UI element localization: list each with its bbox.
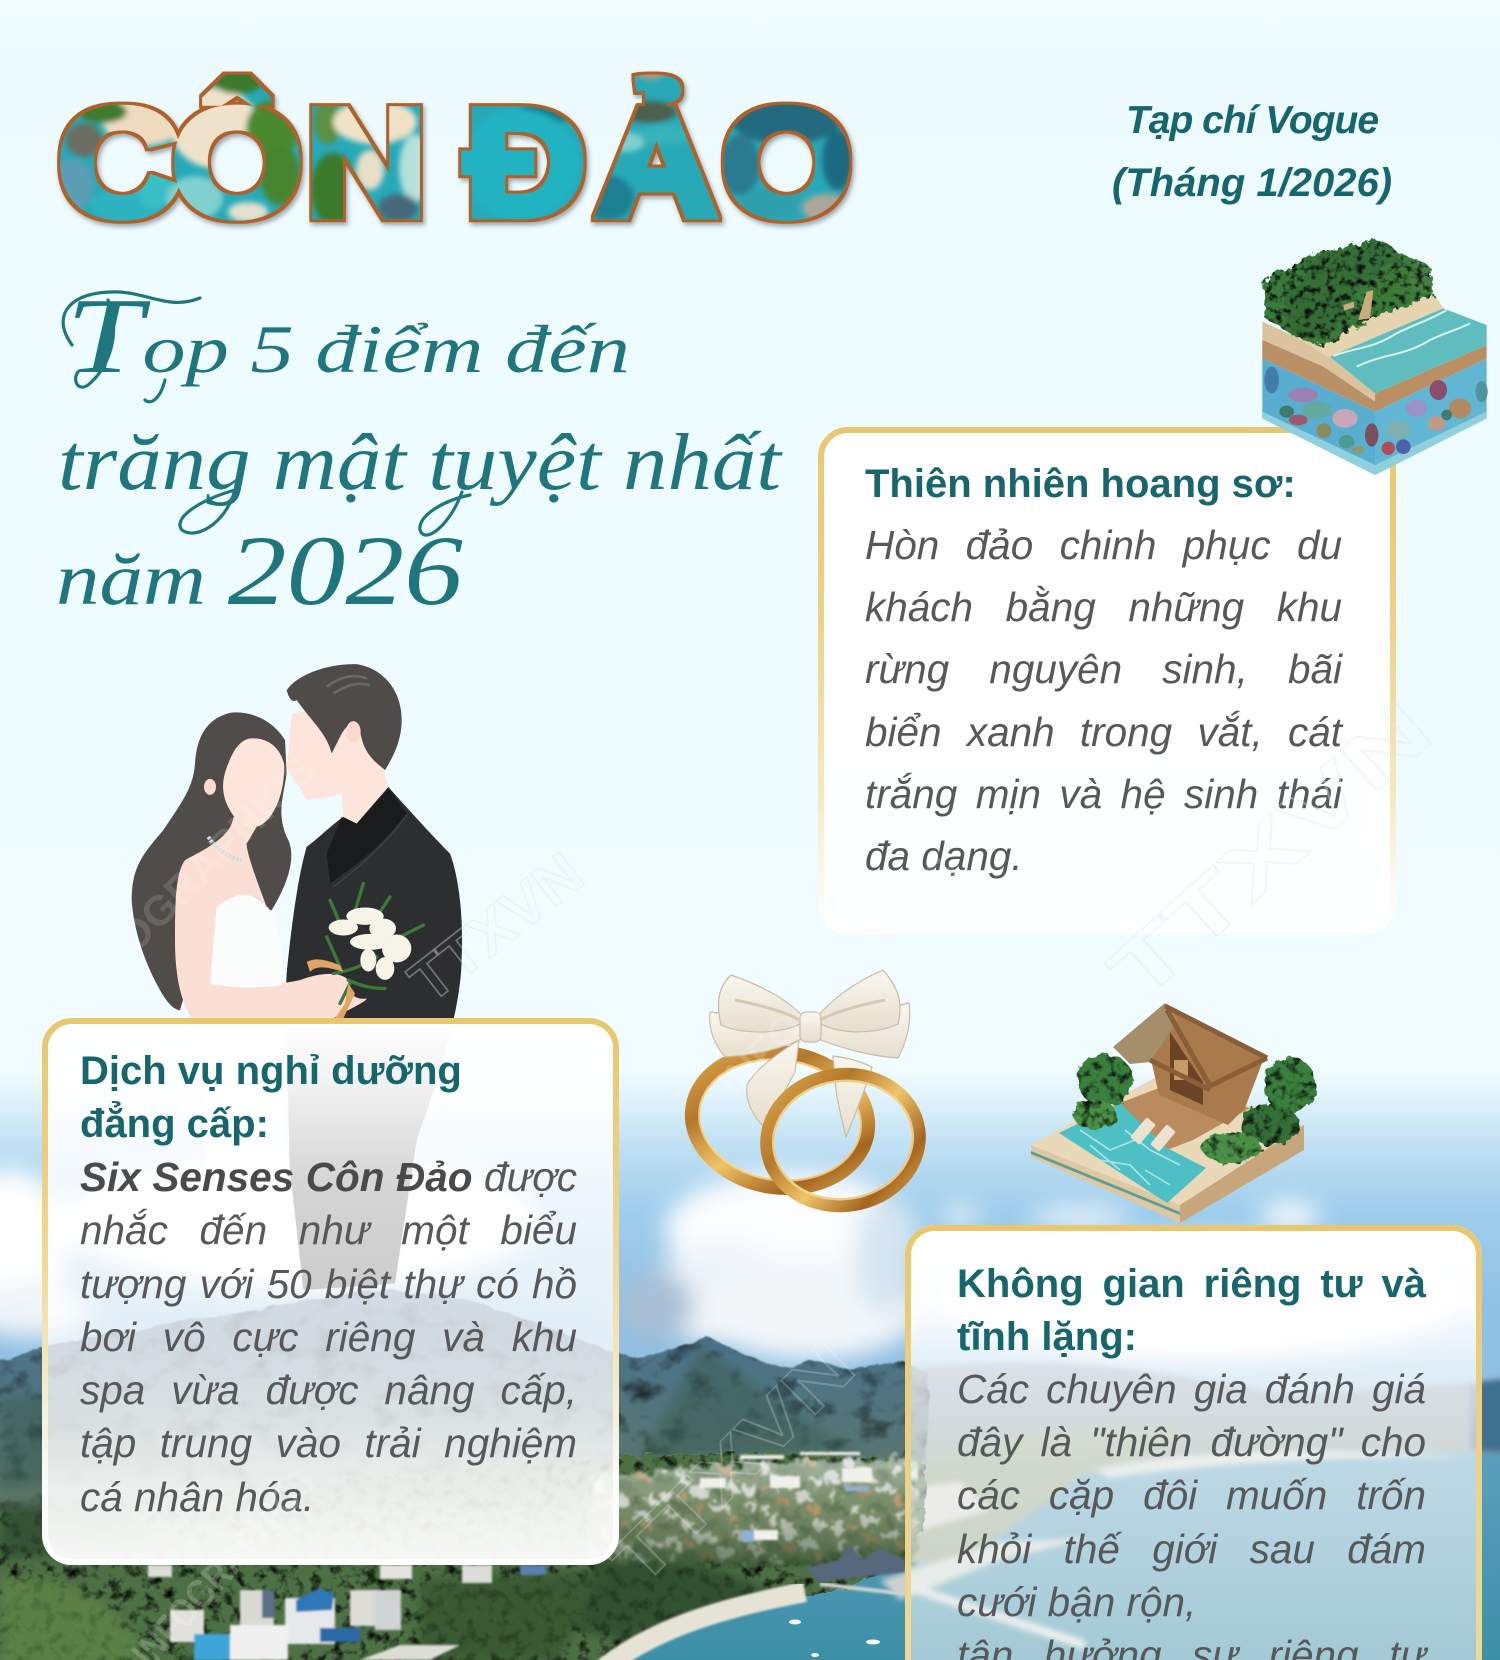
sand top (1290, 287, 1443, 358)
distant sea (600, 1445, 1500, 1660)
groom neck and face (287, 707, 388, 824)
base top (1031, 1075, 1304, 1205)
heading: script subtitle (56, 277, 783, 620)
body text (80, 1154, 577, 1520)
corals (1264, 367, 1488, 455)
sand right face (1375, 345, 1487, 412)
water top (1330, 308, 1487, 393)
watermark text left: INFOGRAPHICS (58, 745, 325, 1011)
bride back hair (132, 712, 291, 1010)
lit window (1174, 1060, 1188, 1080)
illustration: island cross-section with coral (1262, 238, 1488, 475)
body text: trắng mịn và hệ sinh thái (865, 771, 1342, 817)
body text (865, 522, 1344, 879)
body text: cá nhân hóa. (80, 1474, 314, 1520)
path and sign (1343, 290, 1373, 320)
peninsula sand and coast behind the panel (880, 1427, 1470, 1650)
watermark mark centre: TTXVN (397, 839, 596, 1015)
illustration: bride and groom (132, 664, 462, 1290)
bride necklace (208, 837, 242, 860)
body text: tập trung vào trải nghiệm (80, 1420, 577, 1466)
town buildings (590, 1458, 915, 1566)
groom hair (287, 664, 402, 770)
heading: Không gian riêng tư và (957, 1262, 1426, 1306)
body text: cưới bận rộn, (957, 1579, 1196, 1625)
bride ear (204, 779, 216, 795)
body text: nhắc đến như một biểu (80, 1207, 577, 1253)
bottom edge (1262, 412, 1487, 475)
roof frame (1150, 1006, 1267, 1090)
source: Tạp chí Vogue: (Tháng 1/2026) (1112, 161, 1392, 205)
body text: các cặp đôi muốn trốn (957, 1472, 1426, 1518)
body text: khỏi thế giới sau đám (957, 1526, 1426, 1572)
jetty (820, 1584, 905, 1594)
heading (80, 1049, 462, 1146)
town details (700, 1452, 905, 1582)
hair shine (327, 676, 370, 694)
ground and forest (0, 1452, 925, 1660)
bow (710, 970, 910, 1137)
body text: Hòn đảo chinh phục du (865, 522, 1342, 568)
body text: biển xanh trong vắt, cát (865, 709, 1342, 755)
heading: Dịch vụ nghỉ dưỡng (80, 1049, 462, 1093)
subtitle line 2: trăng mật tuyệt nhất (58, 419, 783, 507)
body text: khách bằng những khu (865, 584, 1342, 630)
soil band (1262, 340, 1375, 412)
ribbon (307, 959, 355, 1018)
watermark mark lower: TTXVN (595, 1326, 870, 1601)
white flowers (329, 908, 411, 980)
ring one (684, 1041, 876, 1199)
body text: Six Senses Côn Đảo được (80, 1154, 577, 1200)
house interior (1170, 1032, 1203, 1105)
subtitle line 1: Top 5 điểm đến (66, 277, 630, 396)
boats (789, 1620, 880, 1657)
source: Tạp chí Vogue (1112, 99, 1392, 205)
waves (1333, 310, 1470, 367)
panel: không gian riêng tư và tĩnh lặng (905, 1225, 1482, 1660)
sun loungers (1130, 1117, 1176, 1152)
heading: đẳng cấp: (80, 1102, 269, 1146)
mountain shading (0, 1345, 860, 1490)
pool (1059, 1103, 1206, 1203)
right edge hill (1470, 1378, 1500, 1452)
leaves (327, 884, 423, 1004)
panel: dịch vụ nghỉ dưỡng đẳng cấp (42, 1018, 619, 1565)
forest (1263, 240, 1433, 347)
underwater right face (1375, 358, 1487, 475)
lower dress behind the panel (200, 1018, 292, 1274)
body text: Các chuyên gia đánh giá (957, 1366, 1426, 1412)
sand left face (1262, 322, 1375, 412)
hotel buildings at the bottom (148, 1565, 546, 1660)
far hill behind the right panel (880, 1362, 1500, 1500)
deck (1120, 1088, 1250, 1150)
bride face (223, 738, 284, 827)
beach (604, 1592, 805, 1660)
heading (957, 1262, 1426, 1359)
heading: Thiên nhiên hoang sơ: (865, 462, 1296, 506)
illustration: beach villa with pool (1031, 1003, 1317, 1223)
body text: spa vừa được nâng cấp, (80, 1367, 577, 1413)
bride dress (210, 895, 282, 987)
body text: rừng nguyên sinh, bãi (865, 646, 1342, 692)
forest tones (0, 1500, 780, 1660)
panel: thiên nhiên hoang sơ (818, 427, 1396, 934)
body text: đây là "thiên đường" cho (957, 1419, 1426, 1465)
plants (1073, 1054, 1316, 1164)
body text (957, 1366, 1428, 1660)
decorative swashes (63, 292, 470, 535)
base sides (1031, 1125, 1304, 1223)
groom suit (283, 787, 462, 1290)
underwater left face (1262, 358, 1375, 475)
roof thatch (1113, 1003, 1178, 1064)
house body (1150, 1008, 1264, 1125)
ring two (759, 1065, 927, 1215)
source: Tạp chí Vogue: Tạp chí Vogue (1126, 99, 1378, 142)
mountains (0, 1291, 930, 1520)
heading: tĩnh lặng: (957, 1315, 1137, 1359)
body text: bơi vô cực riêng và khu (80, 1314, 577, 1360)
watermark text middle: INFOGRAPHICS (708, 847, 968, 1106)
bride body and arm (175, 817, 367, 1018)
illustration: wedding rings with bow (684, 970, 926, 1212)
body text: tượng với 50 biệt thự có hồ (80, 1261, 577, 1307)
clouds (0, 1150, 1460, 1360)
groom ear (346, 721, 361, 742)
watermark mark right: TTXVN (1092, 684, 1449, 1018)
grey pavilion roof (805, 1545, 905, 1582)
body text: đa dạng. (865, 833, 1023, 879)
